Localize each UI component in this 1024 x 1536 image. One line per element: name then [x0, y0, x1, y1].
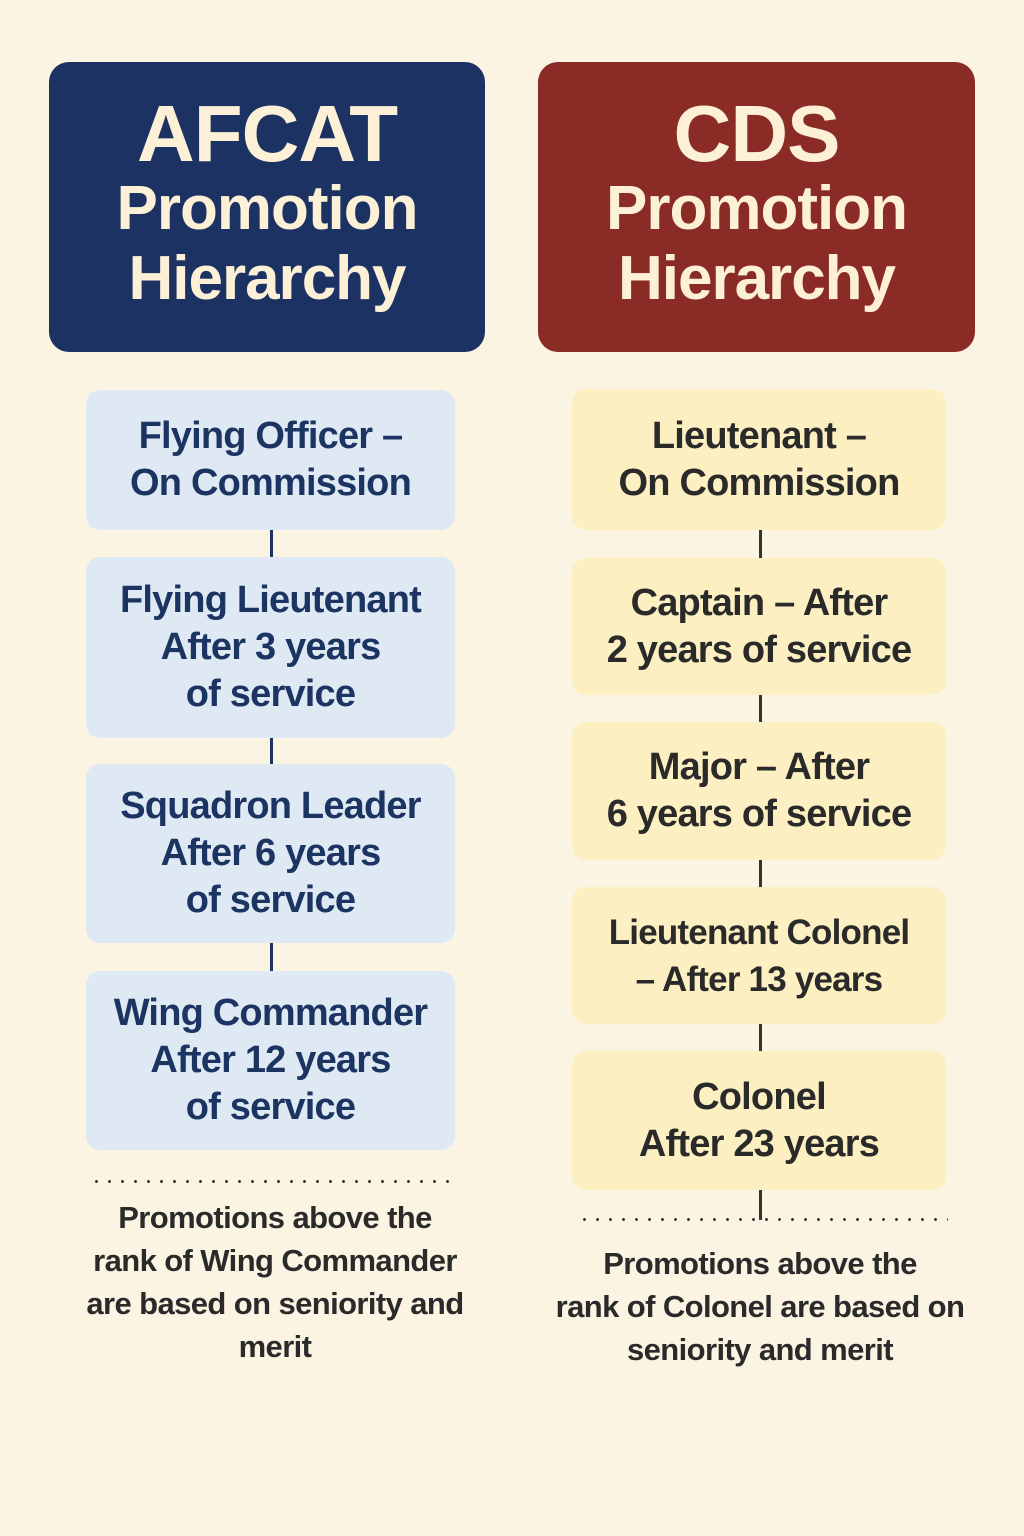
dotted divider right — [578, 1218, 948, 1221]
left rank: Flying Lieutenant: Flying Lieutenant — [120, 579, 421, 621]
left rank: Flying Officer: On Commission — [130, 462, 411, 504]
note left: merit — [239, 1329, 311, 1364]
right rank: Lieutenant Colonel: – After 13 years — [636, 960, 882, 998]
right rank: Lieutenant Colonel — [572, 887, 946, 1024]
left rank: Wing Commander — [86, 971, 455, 1150]
note right — [556, 1246, 964, 1367]
right rank: Lieutenant — [572, 389, 946, 530]
right rank: Colonel: After 23 years — [639, 1122, 879, 1164]
left rank: Squadron Leader — [86, 764, 455, 943]
note left: rank of Wing Commander — [93, 1243, 457, 1278]
right rank: Captain: Captain – After — [631, 582, 887, 624]
header: CDS: Promotion — [606, 174, 907, 243]
note left — [86, 1200, 464, 1364]
left rank: Wing Commander: of service — [186, 1086, 355, 1128]
header: AFCAT: Promotion — [116, 174, 417, 243]
connector line left — [270, 530, 273, 1150]
note right: rank of Colonel are based on — [556, 1289, 964, 1324]
right rank: Captain: 2 years of service — [607, 628, 911, 670]
left rank: Flying Lieutenant: After 3 years — [161, 626, 380, 668]
right rank: Lieutenant: On Commission — [619, 462, 899, 504]
header: CDS — [538, 62, 975, 352]
header: AFCAT: AFCAT — [137, 89, 397, 178]
right rank: Lieutenant: Lieutenant – — [652, 414, 866, 456]
header: CDS: Hierarchy — [618, 244, 895, 313]
note left: Promotions above the — [118, 1200, 432, 1235]
right rank: Colonel — [572, 1051, 946, 1190]
right rank: Major: 6 years of service — [607, 793, 911, 835]
note right: Promotions above the — [603, 1246, 917, 1281]
header: AFCAT — [49, 62, 485, 352]
connector line right — [759, 530, 762, 1220]
right rank: Major: Major – After — [649, 746, 869, 788]
left rank: Flying Officer: Flying Officer – — [139, 415, 402, 457]
header: CDS: CDS — [674, 89, 839, 178]
left rank: Squadron Leader: Squadron Leader — [120, 785, 421, 827]
note right: seniority and merit — [627, 1332, 893, 1367]
left rank: Wing Commander: Wing Commander — [114, 992, 427, 1034]
right rank: Captain — [572, 558, 946, 695]
right rank: Lieutenant Colonel: Lieutenant Colonel — [609, 912, 909, 952]
header: AFCAT: Hierarchy — [128, 244, 406, 313]
left rank: Flying Lieutenant: of service — [186, 673, 355, 715]
dotted divider left — [90, 1180, 452, 1183]
left rank: Flying Lieutenant — [86, 557, 455, 738]
right rank: Major — [572, 722, 946, 860]
right rank: Colonel: Colonel — [692, 1076, 826, 1118]
left rank: Flying Officer — [86, 390, 455, 530]
left rank: Squadron Leader: After 6 years — [161, 832, 380, 874]
left rank: Squadron Leader: of service — [186, 879, 355, 921]
note left: are based on seniority and — [86, 1286, 464, 1321]
left rank: Wing Commander: After 12 years — [150, 1039, 391, 1081]
